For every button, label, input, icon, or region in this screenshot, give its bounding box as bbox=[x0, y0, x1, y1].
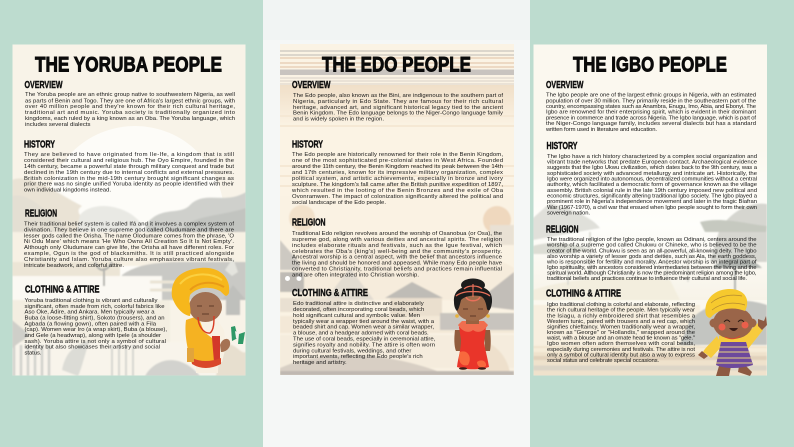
text: Igbo overview: population of over 30 million. They primarily reside in the southeastern part of the bbox=[546, 98, 757, 104]
text: Igbo clothing: the Isiagu, a richly embroidered shirt that resembles a bbox=[547, 313, 696, 319]
heading: Yoruba history: HISTORY bbox=[24, 140, 55, 150]
text: Edo clothing: decorated, often incorporating coral beads, which bbox=[293, 307, 424, 313]
text: Yoruba clothing: Aso Oke, Adire, and Ankara. Men typically wear a bbox=[24, 310, 155, 316]
text: Edo religion: includes elaborate rituals and festivals, such as the Igue festival, which bbox=[292, 243, 502, 249]
heading: Edo history: HISTORY bbox=[292, 140, 323, 150]
text: Edo clothing: typically wear a wrapper tied around the waist, with a bbox=[293, 319, 435, 325]
text: Yoruba overview: kingdoms, each ruled by a king known as an Oba. The Yoruba language, which bbox=[25, 116, 235, 122]
text: Edo history: sculpture. The kingdom's fall came after the British punitive expedition of 1897, bbox=[292, 182, 503, 188]
panel: Yoruba people bbox=[12, 44, 246, 376]
text: Igbo history: authority, which facilitated a democratic form of governance known as the village bbox=[547, 182, 758, 188]
text: Igbo history: sophisticated society with advanced metallurgy and intricate art. Historically, the bbox=[547, 171, 758, 177]
text: Igbo clothing: known as "George" or "Hollandis," wrapped around the bbox=[547, 330, 696, 336]
title: The Yoruba People: THE YORUBA PEOPLE bbox=[35, 52, 222, 76]
text: Yoruba clothing: and Gele (a headwrap), along with Ipele (a shoulder bbox=[24, 333, 161, 339]
icon: Edo woman in red dress with coral beads bbox=[454, 278, 492, 370]
text: Edo religion: the living and should be honored and appeased. While many Edo people have bbox=[292, 261, 503, 267]
text: Edo history: Ovonramwen. The impact of colonization significantly altered the political and bbox=[292, 194, 503, 200]
text: Yoruba history: They are believed to have originated from Ile-Ife, a kingdom that is still bbox=[24, 152, 234, 158]
icon: Igbo girl in yellow head tie waving bbox=[698, 289, 767, 376]
text: Yoruba religion: Their traditional belief system is called Ifá and it involves a complex system of bbox=[24, 222, 234, 228]
text: Igbo clothing: waist, with a blouse and an ornate head tie known as "gele." bbox=[546, 336, 695, 342]
text: Igbo religion: who is responsible for fertility and morality. Ancestor worship is an integral part of bbox=[546, 260, 757, 266]
heading: Igbo history: HISTORY bbox=[546, 141, 578, 152]
text: Edo religion: supreme god, along with various deities and ancestral spirits. The religion bbox=[292, 237, 502, 243]
text: Igbo clothing bbox=[546, 302, 696, 364]
text: Igbo history: assembly. British colonial rule in the late 19th century imposed new political and bbox=[547, 188, 757, 194]
title: The Edo People: THE EDO PEOPLE bbox=[322, 52, 471, 76]
text: Edo history: one of the most sophisticated pre-colonial states in West Africa. Founded bbox=[292, 158, 503, 164]
text: Edo clothing: signifies royalty and nobility. The attire is often worn bbox=[293, 342, 435, 348]
text: Edo clothing bbox=[293, 301, 436, 366]
text: Yoruba history: 14th century, became a powerful state through military conquest and trade but bbox=[24, 164, 234, 170]
text: Edo overview: Nigeria, particularly in Edo State. They are famous for their rich cultural bbox=[293, 99, 503, 105]
text: Yoruba clothing: identity but also showcases their artistry and social bbox=[24, 345, 160, 351]
text: Igbo history: prominent role in Nigeria's independence movement and later in the tragic Biafran bbox=[547, 199, 757, 205]
text: Yoruba history: prior there was no single unified Yoruba identity as people identified with their bbox=[24, 182, 234, 188]
text: Igbo overview: Igbo are renowned for their enterprising spirit, which is evident in their dominant bbox=[546, 110, 756, 116]
text: Igbo overview: the Niger-Congo language family, includes several dialects but has a standard bbox=[546, 121, 756, 127]
text: Yoruba religion: Although only Oludumare can give life, the Orisha all have different roles. For bbox=[24, 245, 234, 251]
text: Edo clothing: The use of coral beads, especially in ceremonial attire, bbox=[293, 336, 436, 342]
text: Edo religion: converted to Christianity, traditional beliefs and practices remain influential bbox=[292, 266, 502, 272]
text: Edo history: around the 11th century, the Benin Kingdom reached its peak between the 14th bbox=[292, 164, 503, 170]
heading: Edo religion: RELIGION bbox=[292, 218, 326, 228]
text: Yoruba religion: Christianity and Islam. Yoruba culture also emphasizes vibrant festivals, bbox=[24, 257, 234, 263]
text: Igbo religion: traditional beliefs and practices continue to influence their cultural and social life. bbox=[547, 276, 747, 282]
text: Edo history: which resulted in the looting of the Benin Bronzes and the exile of Oba bbox=[291, 188, 504, 194]
text: Yoruba history: considered their cultural and religious hub. The Oyo Empire, founded in the bbox=[24, 158, 235, 164]
text: Igbo clothing: only a symbol of cultural identity but also a way to express bbox=[547, 352, 695, 358]
text: Edo religion: Traditional Edo religion revolves around the worship of Osanobua (or Osa), the bbox=[292, 231, 503, 237]
text: Yoruba overview: includes several dialects bbox=[25, 122, 91, 128]
text: Igbo overview: presence in commerce and trade across Nigeria. The Igbo language, which is part of bbox=[546, 115, 756, 121]
text: Igbo overview: The Igbo people are one of the largest ethnic groups in Nigeria, with an estimated bbox=[546, 92, 756, 98]
icon: Nigerian flag bbox=[231, 326, 245, 344]
title: The Igbo People: THE IGBO PEOPLE bbox=[573, 52, 727, 76]
text: Edo clothing: a blouse, and a headgear adorned with coral beads. bbox=[293, 331, 429, 337]
text: Yoruba overview bbox=[25, 92, 236, 128]
text: Igbo religion: Igbo spirituality, with ancestors considered intermediaries between the living and the bbox=[547, 265, 757, 271]
heading: Yoruba clothing and attire: CLOTHING & ATTIRE bbox=[25, 284, 100, 296]
heading: Yoruba overview: OVERVIEW bbox=[24, 80, 63, 91]
text: Yoruba religion bbox=[24, 222, 235, 269]
text: Yoruba clothing bbox=[24, 298, 167, 356]
text: Yoruba history: declined in the 19th century due to internal conflicts and external pressures. bbox=[24, 170, 234, 176]
text: Igbo religion: creator of the world. Chukwu is seen as an all-powerful, all-knowing deity. The Igbo bbox=[547, 248, 757, 254]
text: Edo history: and 17th centuries, known for its impressive military organization, complex bbox=[292, 170, 503, 176]
text: Igbo clothing: social status and celebrate special occasions. bbox=[547, 358, 659, 364]
text: Edo history bbox=[291, 152, 504, 206]
text: Edo clothing: important events, reflecting the Edo people's rich bbox=[293, 354, 423, 360]
heading: Igbo religion: RELIGION bbox=[546, 224, 578, 236]
text: Igbo history: War (1967-1970), a civil war that ensued when Igbo people sought to form their own bbox=[547, 205, 757, 211]
text: Edo clothing: beaded shirt and cap. Women wear a similar wrapper, bbox=[293, 325, 434, 331]
text: Edo religion bbox=[292, 231, 503, 278]
text: Edo clothing: Edo traditional attire is distinctive and elaborately bbox=[293, 301, 424, 307]
text: Yoruba clothing: (cap). Women wear Iro (a wrap skirt), Buba (a blouse), bbox=[24, 327, 167, 333]
text: Igbo history: economic structures, significantly altering traditional Igbo society. The Igbo played a bbox=[547, 194, 758, 200]
text: Igbo religion: also worship a variety of lesser gods and deities, such as Ala, the earth goddess, bbox=[547, 254, 757, 260]
panel: Edo people bbox=[280, 44, 514, 376]
text: Igbo history: The Igbo have a rich history characterized by a complex social organization and bbox=[547, 154, 757, 160]
text: Yoruba clothing: Agbada (a flowing gown), often paired with a Fila bbox=[24, 321, 157, 327]
text: Edo clothing: hold significant cultural and symbolic value. Men bbox=[293, 313, 420, 319]
text: Igbo history: suggests that the Igbo Ukwu civilization, which dates back to the 9th century, was a bbox=[547, 165, 758, 171]
text: Yoruba history: own individual kingdoms instead. bbox=[24, 188, 111, 194]
text: Igbo religion: The traditional religion of the Igbo people, known as Odinani, centers around the bbox=[547, 237, 757, 243]
heading: Igbo clothing and attire: CLOTHING & ATTIRE bbox=[546, 288, 621, 300]
text: Edo clothing: heritage and artistry. bbox=[293, 360, 347, 366]
text: Edo religion: Ancestral worship is a central aspect, with the belief that ancestors influence bbox=[292, 255, 503, 261]
heading: Edo overview: OVERVIEW bbox=[292, 80, 331, 91]
text: Edo overview: The Edo people, also known as the Bini, are indigenous to the southern part of bbox=[293, 93, 503, 99]
text: Edo overview bbox=[293, 93, 503, 122]
text: Edo history: political system, and artistic achievements, especially in bronze and ivory bbox=[292, 176, 503, 182]
text: Igbo clothing: Igbo women often adorn themselves with coral beads, bbox=[547, 341, 695, 347]
text: Igbo clothing: the rich cultural heritage of the people. Men typically wear bbox=[547, 308, 695, 314]
text: Igbo clothing: especially during ceremonies and festivals. The attire is not bbox=[547, 347, 695, 353]
text: Igbo religion: worship of a supreme god called Chukwu or Chineke, who is believed to be the bbox=[546, 243, 757, 249]
text: Yoruba overview: over 40 million people and they're known for their rich cultural heritage, bbox=[25, 104, 235, 110]
text: Igbo overview: written form used in literature and education. bbox=[545, 127, 657, 133]
text: Yoruba clothing: status. bbox=[24, 350, 42, 356]
text: Igbo clothing: Igbo traditional clothing is colorful and elaborate, reflecting bbox=[547, 302, 695, 308]
text: Yoruba clothing: Buba (a loose-fitting shirt), Sokoto (trousers), and an bbox=[24, 316, 164, 322]
text: Igbo history: vibrant trade networks that predate European contact. Archaeological evidence bbox=[547, 160, 758, 166]
icon: Yoruba woman with gele and flag bbox=[172, 268, 245, 373]
text: Igbo overview bbox=[545, 92, 757, 133]
text: Edo overview: and is widely spoken in the region. bbox=[293, 116, 384, 122]
text: Yoruba overview: as parts of Benin and Togo. They are one of Africa's largest ethnic groups, with bbox=[25, 98, 235, 104]
text: Yoruba religion: Ni Odu Mare' which means 'He Who Owns All Creation So It Is Not Empty'. bbox=[24, 239, 234, 245]
text: Yoruba history: British colonization in the mid-19th century brought significant changes as bbox=[24, 176, 234, 182]
heading: Edo clothing and attire: CLOTHING & ATTIRE bbox=[292, 288, 368, 299]
heading: Yoruba religion: RELIGION bbox=[25, 208, 57, 220]
text: Igbo clothing: Western tunic, paired with trousers and a red cap, which bbox=[547, 319, 695, 325]
text: Yoruba clothing: Yoruba traditional clothing is vibrant and culturally bbox=[24, 298, 158, 304]
text: Igbo religion: spiritual world. Although Christianity is now the predominant religion among the Igbo, bbox=[547, 271, 757, 277]
text: Igbo history: Igbo were organized into autonomous, decentralized communities without a central bbox=[547, 176, 757, 182]
text: Igbo history bbox=[547, 154, 758, 216]
text: Igbo history: sovereign nation. bbox=[547, 210, 590, 216]
text: Yoruba overview: The Yoruba people are an ethnic group native to southwestern Nigeria, as well bbox=[25, 92, 235, 98]
text: Edo clothing: during cultural festivals, weddings, and other bbox=[293, 348, 411, 354]
text: Edo history: The Edo people are historically renowned for their role in the Benin Kingdom, bbox=[292, 152, 503, 158]
text: Yoruba overview: traditional art and music. Yoruba society is traditionally organized into bbox=[25, 110, 236, 116]
text: Yoruba religion: example, Ogun is the god of blacksmiths. It is still practiced alongside bbox=[24, 251, 235, 257]
text: Yoruba religion: divination. They believe in one supreme god called Oludumare and there are bbox=[24, 227, 235, 233]
text: Edo history: social landscape of the Edo people. bbox=[292, 200, 386, 206]
text: Edo overview: Benin Kingdom. The Edo language belongs to the Niger-Congo language family bbox=[293, 110, 503, 116]
text: Edo overview: heritage, advanced art, and significant historical legacy tied to the ancient bbox=[293, 105, 503, 111]
text: Yoruba clothing: sash). Yoruba attire is not only a symbol of cultural bbox=[24, 339, 166, 345]
Igbo panel background art bbox=[533, 44, 767, 376]
text: Igbo overview: country, encompassing states such as Anambra, Enugu, Imo, Abia, and Ebonyi. The bbox=[546, 104, 757, 110]
Edo panel background art bbox=[280, 44, 514, 376]
text: Yoruba religion: intricate beadwork, and colorful attire. bbox=[24, 263, 124, 269]
panel: Igbo people bbox=[533, 44, 767, 376]
text: Edo religion: and are often integrated into Christian worship. bbox=[292, 272, 419, 278]
Yoruba panel background art bbox=[12, 44, 246, 376]
text: Igbo religion bbox=[546, 237, 757, 282]
text: Igbo clothing: signifies chieftaincy. Women traditionally wear a wrapper, bbox=[547, 324, 695, 330]
text: Yoruba history bbox=[24, 152, 235, 194]
text: Yoruba religion: lesser gods called the Orisha. The name Olodumare comes from the phrase, 'O bbox=[24, 233, 234, 239]
heading: Igbo overview: OVERVIEW bbox=[546, 80, 584, 91]
text: Edo religion: celebrates the Oba's (king's) well-being and the community's prosperity. bbox=[292, 249, 502, 255]
text: Yoruba clothing: significant, often made from rich, colorful fabrics like bbox=[24, 304, 165, 310]
